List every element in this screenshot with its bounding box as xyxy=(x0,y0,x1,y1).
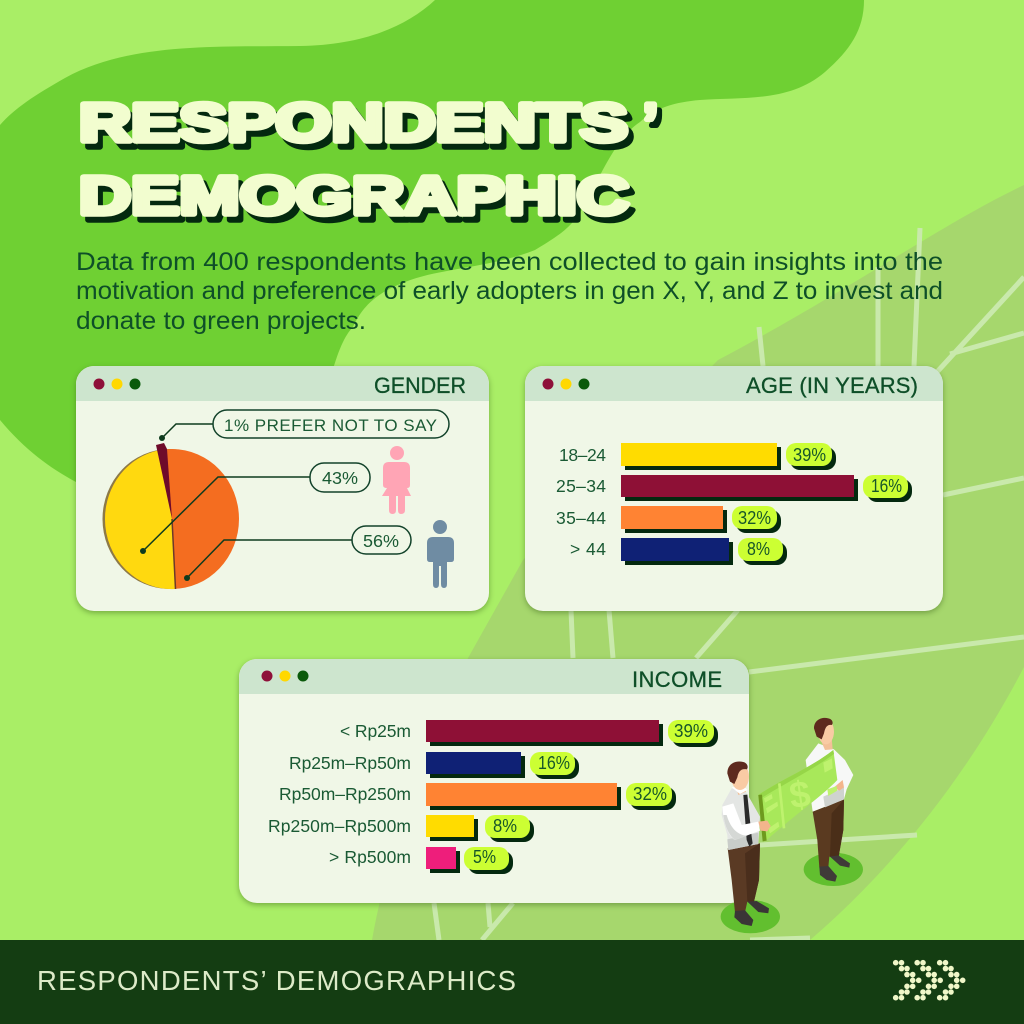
age bar chart: 39% xyxy=(793,445,826,465)
footer title: RESPONDENTS’ DEMOGRAPHICS xyxy=(37,965,516,996)
income bar chart: > Rp500m xyxy=(329,847,411,867)
age heading: AGE (IN YEARS) xyxy=(746,373,918,398)
callout: 56% xyxy=(352,526,411,554)
income bar chart: Rp250m–Rp500m xyxy=(268,816,411,836)
background leaf xyxy=(372,185,1024,940)
income bar chart: < Rp25m xyxy=(340,721,411,741)
intro paragraph: donate to green projects. xyxy=(76,307,366,335)
title: ’ xyxy=(643,93,658,153)
title: RESPONDENTS xyxy=(84,99,633,159)
callout: 1% prefer not to say xyxy=(213,410,449,438)
banknote xyxy=(758,750,837,841)
pie chart xyxy=(102,443,239,589)
age bar chart: 16% xyxy=(871,476,902,496)
background blob xyxy=(0,0,864,482)
banknote: $ xyxy=(787,772,813,817)
leader lines xyxy=(140,424,352,581)
gender heading: GENDER xyxy=(374,373,466,398)
callout: 56%: 56% xyxy=(363,531,399,551)
callout: 43%: 43% xyxy=(322,468,358,488)
intro paragraph: Data from 400 respondents have been collected to gain insights into the xyxy=(76,248,943,276)
income bar chart: 39% xyxy=(674,721,708,741)
panel: age xyxy=(525,366,943,611)
title xyxy=(79,93,663,232)
man at back xyxy=(806,718,853,882)
title: ’ xyxy=(648,99,663,159)
income bar chart: 32% xyxy=(633,784,667,804)
callout: 43% xyxy=(310,463,370,492)
intro paragraph: motivation and preference of early adopters in gen X, Y, and Z to invest and xyxy=(76,277,943,305)
age bar chart: 18–24 xyxy=(559,445,606,465)
intro paragraph xyxy=(76,248,943,335)
income bar chart: 8% xyxy=(493,816,517,836)
age bar chart: 35–44 xyxy=(556,508,606,528)
income bar chart: Rp25m–Rp50m xyxy=(289,753,411,773)
panel: gender xyxy=(76,366,489,611)
income bar chart: 5% xyxy=(473,847,496,867)
title: DEMOGRAPHIC xyxy=(79,166,629,226)
man at front xyxy=(722,761,771,926)
footer bar xyxy=(0,940,1024,1024)
income bar chart: 16% xyxy=(538,753,570,773)
age bar chart: > 44 xyxy=(570,539,606,559)
income bar chart xyxy=(268,720,718,874)
age bar chart: 32% xyxy=(738,508,771,528)
age bar chart: 8% xyxy=(747,539,770,559)
callout: 1% prefer not to say: 1% PREFER NOT TO SAY xyxy=(224,416,437,435)
panel: income xyxy=(239,659,749,903)
icon: man xyxy=(427,520,454,588)
illustration: two men holding a banknote xyxy=(721,718,863,933)
age bar chart xyxy=(556,443,912,565)
icon: woman xyxy=(382,446,411,514)
title: RESPONDENTS xyxy=(79,93,628,153)
icon: dotted chevrons xyxy=(893,960,966,1000)
age bar chart: 25–34 xyxy=(556,476,606,496)
title: DEMOGRAPHIC xyxy=(84,172,634,232)
income heading: INCOME xyxy=(632,667,722,692)
income bar chart: Rp50m–Rp250m xyxy=(279,784,411,804)
